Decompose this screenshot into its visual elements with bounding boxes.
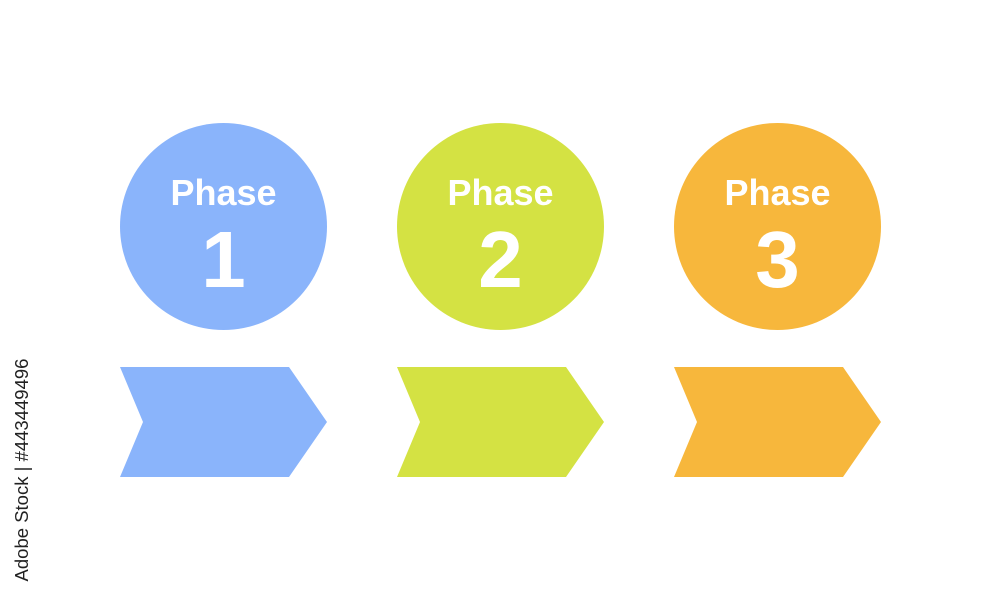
circle: phase 3: Phase [724, 172, 831, 213]
circle: phase 2: Phase [447, 172, 554, 213]
circle: phase 2: 2 [478, 215, 523, 304]
side credit text: Adobe Stock | #443449496 [11, 359, 32, 581]
circle: phase 1: Phase [170, 172, 277, 213]
circle: phase 3: 3 [755, 215, 800, 304]
circle: phase 1 [120, 123, 327, 330]
circle: phase 3 [674, 123, 881, 330]
circle: phase 2 [397, 123, 604, 330]
arrow: phase 3 [674, 367, 881, 477]
arrow: phase 2 [397, 367, 604, 477]
circle: phase 1: 1 [201, 215, 246, 304]
arrow: phase 1 [120, 367, 327, 477]
